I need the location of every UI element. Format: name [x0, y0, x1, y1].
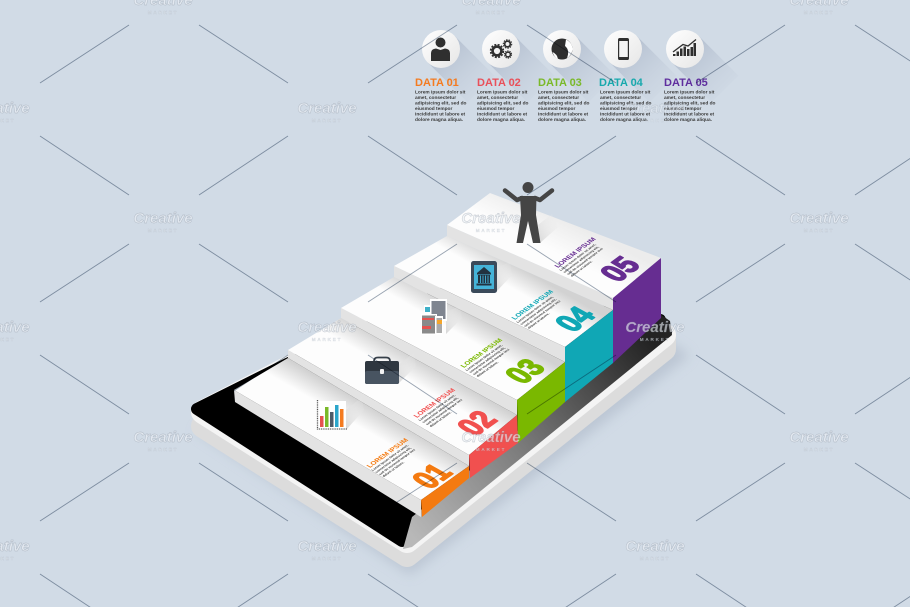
data 03 column: DATA 03 — [538, 77, 582, 89]
step 5: Lorem ipsum dolor sit amet, — [558, 243, 597, 271]
step 5: 05 — [593, 252, 648, 287]
watermarks: Creative — [461, 210, 521, 227]
step 1: LOREM IPSUM — [366, 438, 411, 469]
staircase — [234, 193, 661, 517]
watermarks: MARKET — [640, 337, 670, 342]
step 2: 02 — [450, 406, 505, 441]
info row: five data columns — [415, 30, 738, 123]
watermarks: MARKET — [476, 10, 506, 15]
watermarks: Creative — [297, 100, 357, 117]
data 02 column: dolore magna aliqua. — [477, 117, 525, 123]
tablet device — [195, 280, 690, 575]
step 3: Lorem ipsum dolor sit amet, — [464, 344, 504, 371]
step 3: sed do eiusmod tempor inci — [472, 348, 511, 376]
step 1: Lorem ipsum dolor sit amet, — [370, 444, 410, 472]
data 05 column: dolore magna aliqua. — [664, 117, 712, 123]
watermarks: Creative — [133, 429, 193, 446]
step 4: consectetur adipisicing elit, — [519, 298, 558, 325]
step 5 — [447, 193, 661, 363]
step 1 — [234, 358, 469, 517]
data 01 column: dolore magna aliqua. — [415, 117, 463, 123]
data 01 column: DATA 01 — [415, 77, 459, 89]
data 01 column: incididunt ut labore et — [415, 112, 466, 118]
watermarks: MARKET — [148, 447, 178, 452]
icon: tablet with bank — [471, 261, 497, 293]
step 2: sed do eiusmod tempor inci — [425, 398, 464, 426]
watermarks: Creative — [297, 319, 357, 336]
data 03 column: dolore magna aliqua. — [538, 117, 586, 123]
data 01 column: eiusmod tempor — [415, 106, 452, 112]
data 03 column: amet, consectetur — [538, 95, 579, 101]
data 05 column: incididunt ut labore et — [664, 112, 715, 118]
icon: phone — [618, 38, 629, 60]
data 05 column — [664, 30, 738, 123]
data 02 column: eiusmod tempor — [477, 106, 514, 112]
icon: gears — [491, 40, 512, 58]
watermarks: Creative — [789, 210, 849, 227]
watermarks: Creative — [625, 100, 685, 117]
data 03 column: adipisicing elit, sed do — [538, 100, 590, 106]
tablet screen — [197, 290, 672, 549]
data 05 column: amet, consectetur — [664, 95, 705, 101]
data 01 column: Lorem ipsum dolor sit — [415, 90, 466, 96]
icon: growth chart — [673, 40, 696, 56]
data 02 column: Lorem ipsum dolor sit — [477, 90, 528, 96]
icon: documents — [421, 299, 447, 335]
data 02 column: incididunt ut labore et — [477, 112, 528, 118]
watermarks: MARKET — [640, 556, 670, 561]
watermarks: Creative — [789, 429, 849, 446]
icon: briefcase — [365, 358, 399, 384]
watermarks: MARKET — [640, 118, 670, 123]
data 03 column: Lorem ipsum dolor sit — [538, 90, 589, 96]
watermarks: MARKET — [148, 10, 178, 15]
watermarks: MARKET — [476, 447, 506, 452]
data 03 column: eiusmod tempor — [538, 106, 575, 112]
data 04 column: amet, consectetur — [600, 95, 641, 101]
watermarks: Creative — [625, 319, 685, 336]
step 1: 01 — [405, 459, 460, 494]
data 04 column: incididunt ut labore et — [600, 112, 651, 118]
watermarks: Creative — [133, 210, 193, 227]
icon: standing figure — [505, 182, 552, 243]
data 04 column: DATA 04 — [599, 77, 644, 89]
watermarks: MARKET — [804, 447, 834, 452]
data 04 column: eiusmod tempor — [600, 106, 637, 112]
step 3: 03 — [498, 354, 553, 389]
data 05 column: DATA 05 — [664, 77, 708, 89]
watermarks: MARKET — [148, 228, 178, 233]
step 4: didunt ut labore. — [526, 312, 551, 329]
data 04 column: adipisicing elit, sed do — [600, 100, 652, 106]
watermarks: MARKET — [312, 556, 342, 561]
watermarks: Creative — [297, 538, 357, 555]
step 4: 04 — [548, 302, 604, 337]
step 5: LOREM IPSUM — [554, 237, 598, 269]
watermarks: MARKET — [804, 10, 834, 15]
data 05 column: eiusmod tempor — [664, 106, 701, 112]
watermarks: Creative — [625, 538, 685, 555]
icon: globe — [552, 38, 573, 60]
watermarks: MARKET — [476, 228, 506, 233]
step 3: LOREM IPSUM — [460, 338, 505, 369]
step 3: didunt ut labore. — [475, 361, 500, 378]
step 2: LOREM IPSUM — [413, 388, 458, 419]
data 05 column: Lorem ipsum dolor sit — [664, 90, 715, 96]
data 03 column: incididunt ut labore et — [538, 112, 589, 118]
watermarks: MARKET — [804, 228, 834, 233]
watermarks: MARKET — [312, 337, 342, 342]
step 4: sed do eiusmod tempor inci — [523, 300, 562, 327]
step 2 — [288, 318, 518, 478]
data 04 column — [599, 30, 676, 123]
step 5: consectetur adipisicing elit, — [562, 246, 600, 273]
data 02 column: amet, consectetur — [477, 95, 518, 101]
icon: bar chart — [318, 400, 347, 429]
step 1: consectetur adipisicing elit, — [374, 446, 413, 474]
step 4 — [394, 236, 613, 402]
data 05 column: adipisicing elit, sed do — [664, 100, 716, 106]
step 4: LOREM IPSUM — [511, 289, 556, 321]
step 5: sed do eiusmod tempor inci — [566, 247, 604, 275]
data 02 column: DATA 02 — [477, 77, 521, 89]
watermarks: MARKET — [312, 118, 342, 123]
data 02 column: adipisicing elit, sed do — [477, 100, 529, 106]
step 1: sed do eiusmod tempor inci — [378, 448, 416, 476]
step 2: Lorem ipsum dolor sit amet, — [417, 394, 457, 422]
data 04 column: dolore magna aliqua. — [600, 117, 648, 123]
step 4: Lorem ipsum dolor sit amet, — [515, 296, 555, 323]
icon shadows on steps — [346, 214, 558, 430]
step 3: consectetur adipisicing elit, — [468, 346, 507, 374]
watermarks: Creative — [461, 429, 521, 446]
data 01 column: adipisicing elit, sed do — [415, 100, 467, 106]
icon: person — [431, 38, 450, 61]
step 2: didunt ut labore. — [428, 411, 453, 428]
data 01 column: amet, consectetur — [415, 95, 456, 101]
step 5: didunt ut labore. — [569, 260, 594, 277]
step 3 — [341, 277, 565, 443]
data 01 column — [415, 30, 494, 123]
data 04 column: Lorem ipsum dolor sit — [600, 90, 651, 96]
step 1: didunt ut labore. — [381, 461, 406, 478]
data 02 column — [477, 30, 554, 123]
step 2: consectetur adipisicing elit, — [421, 396, 460, 424]
data 03 column — [538, 30, 615, 123]
